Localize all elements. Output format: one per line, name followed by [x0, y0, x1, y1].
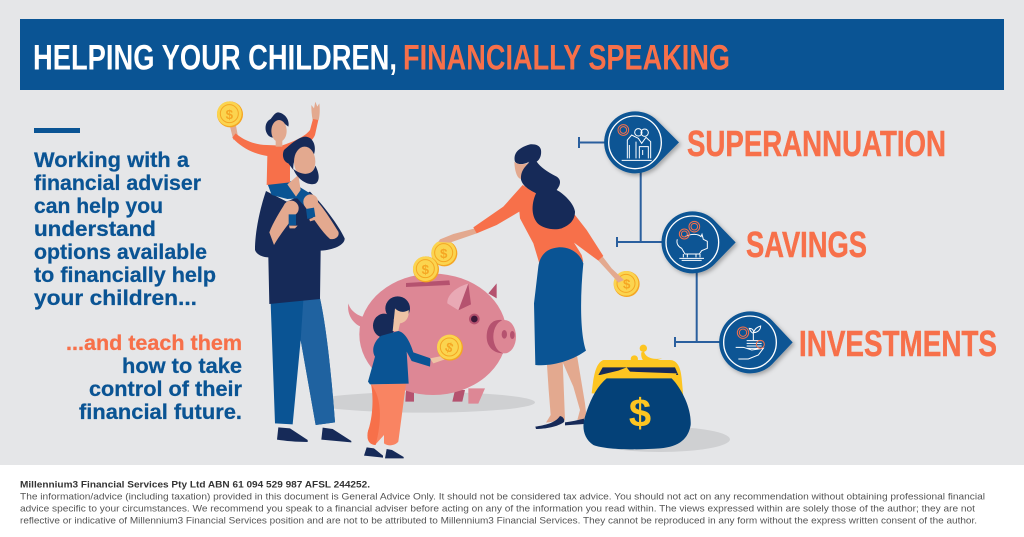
father body: [255, 191, 351, 442]
purse: [583, 345, 691, 449]
illustration: mother and purse: [438, 144, 730, 452]
badges: [604, 111, 793, 373]
child on shoulders: $: [226, 107, 234, 122]
girl: $: [443, 339, 456, 356]
title banner: [20, 19, 1004, 90]
intro text: understand: [34, 218, 156, 241]
father arms and face: [269, 137, 339, 245]
intro text: financial adviser: [34, 172, 201, 195]
disclaimer: advice specific to your circumstances. We recommend you speak to a financial adviser before acting on any of the information you read within. The views expressed within are solely those of the author; they are not: [20, 502, 975, 514]
badge: savings: [661, 211, 736, 273]
connector lines: [579, 137, 725, 347]
falling coins: [413, 240, 457, 282]
closing text: ...and teach them: [66, 332, 242, 355]
falling coins: $: [422, 262, 430, 277]
illustration: piggy bank and family: [217, 101, 535, 458]
intro text: can help you: [34, 195, 163, 218]
disclaimer: [20, 490, 985, 526]
piggy bank: [348, 274, 516, 404]
closing text: [66, 332, 242, 424]
girl: [364, 296, 463, 458]
mother: $: [623, 277, 631, 292]
badge: superannuation: [604, 111, 679, 173]
footer panel: [0, 465, 1024, 537]
icon: hand with plant: [736, 326, 763, 359]
falling coins: $: [440, 246, 448, 261]
child lower legs: [289, 208, 317, 228]
purse: $: [629, 392, 651, 436]
intro text: your children...: [34, 287, 197, 310]
label: superannuation: SUPERANNUATION: [687, 123, 946, 164]
title highlight: FINANCIALLY SPEAKING: [403, 38, 730, 78]
closing text: control of their: [89, 378, 242, 401]
accent bar: [34, 128, 80, 133]
label: savings: SAVINGS: [746, 224, 867, 265]
icon: piggy bank: [677, 234, 707, 260]
intro text: [34, 149, 216, 310]
closing text: how to take: [122, 355, 242, 378]
badge: investments: [719, 311, 793, 373]
company line: Millennium3 Financial Services Pty Ltd ABN 61 094 529 987 AFSL 244252.: [20, 480, 370, 490]
purse shadow: [590, 427, 730, 452]
closing text: financial future.: [79, 401, 242, 424]
mother: [438, 144, 640, 429]
title: HELPING YOUR CHILDREN,: [33, 38, 397, 78]
disclaimer: The information/advice (including taxation) provided in this document is General Advice Only. It should not be considered tax advice. You should not act on any recommendation without obtaining professional financial: [20, 490, 985, 502]
child on shoulders: [217, 101, 320, 207]
intro text: Working with a: [34, 149, 189, 172]
intro text: options available: [34, 241, 207, 264]
icon: retired couple: [622, 129, 652, 160]
intro text: to financially help: [34, 264, 216, 287]
pig shadow: [312, 392, 535, 413]
disclaimer: reflective or indicative of Millennium3 Financial Services position and are not to be attributed to Millennium3 Financial Services. They cannot be reproduced in any form without the express written consent of the author.: [20, 514, 977, 526]
